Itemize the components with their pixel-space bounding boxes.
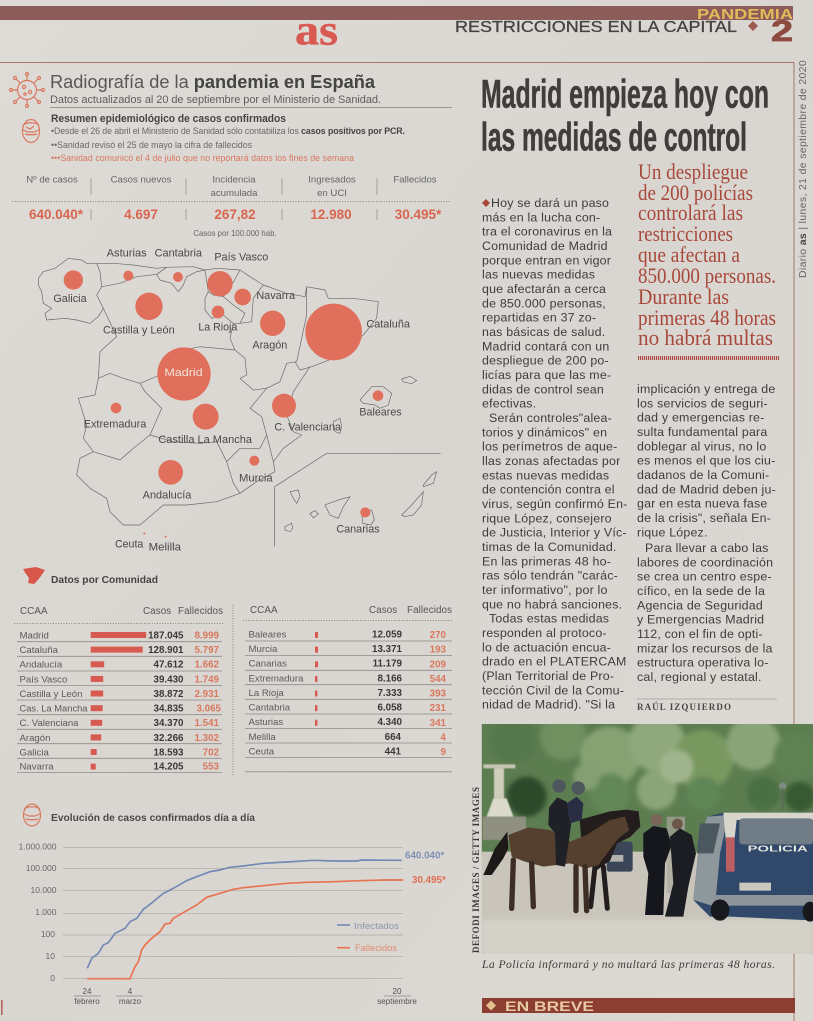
rows: Cantabria — [248, 703, 291, 714]
rows: C. Valenciana — [20, 718, 79, 729]
region labels: C. Valenciana — [274, 421, 341, 433]
article column 1: lo de actuación encua- — [482, 640, 611, 654]
small bars — [315, 632, 318, 726]
page header band — [0, 6, 793, 48]
article column 2: estructura operativa lo- — [637, 656, 769, 670]
article column 2: doblegar al virus, no lo — [637, 439, 766, 453]
article column 1: despliegue de 200 po- — [482, 354, 609, 368]
y axis labels: 10.000 — [30, 885, 57, 895]
line: fallecidos — [87, 880, 403, 979]
icon: diamond bullet — [748, 21, 758, 31]
stat values: 267,82 — [214, 207, 256, 222]
rows: 4 — [441, 732, 447, 743]
region labels: Extremadura — [84, 418, 146, 430]
photo caption: La Policía informará y no multará las primeras 48 horas. — [481, 958, 775, 971]
rows: 6.058 — [377, 703, 403, 714]
x axis labels: 20 — [393, 987, 402, 996]
article column 2: los servicios de seguri- — [637, 396, 768, 410]
police van — [693, 813, 813, 922]
rows: Murcia — [248, 644, 278, 655]
right table header: Fallecidos — [407, 605, 452, 616]
right table header: CCAA — [250, 605, 278, 616]
rows — [20, 630, 222, 772]
canary islands inset frame — [275, 453, 441, 547]
article column 1: porque entran en vigor — [482, 253, 611, 267]
region labels: Castilla y León — [103, 324, 175, 336]
x axis labels: marzo — [119, 997, 142, 1006]
date sidebar: Diario as | lunes, 21 de septiembre de 2020 — [798, 60, 809, 278]
article column 2: Para llevar a cabo las — [645, 541, 769, 555]
rows: 231 — [430, 703, 447, 714]
article column 1: de Justicia, Interior y Víc- — [482, 526, 627, 540]
summary notes: •Desde el 26 de abril el Ministerio de Sanidad sólo contabiliza los casos positivos por PCR. — [51, 126, 405, 136]
left table header: CCAA — [20, 606, 48, 617]
article column 1: rique López, consejero — [482, 511, 612, 525]
section title: RESTRICCIONES EN LA CAPITAL — [455, 19, 737, 36]
article column 1: nas básicas de salud. — [482, 325, 605, 339]
subtitle: Datos actualizados al 20 de septiembre por el Ministerio de Sanidad. — [50, 94, 381, 106]
region labels: Galicia — [53, 293, 87, 305]
byline: RAÚL IZQUIERDO — [637, 702, 731, 712]
page number: 2 — [771, 15, 793, 48]
stat labels: acumulada — [211, 188, 258, 199]
rows: 128.901 — [148, 645, 184, 656]
ground — [482, 852, 813, 955]
standing officers — [643, 814, 696, 917]
region labels: Cantabria — [155, 248, 202, 260]
rows: Cataluña — [20, 645, 59, 656]
x axis labels: 24 — [83, 987, 92, 996]
rows — [248, 630, 447, 758]
article column 1: En las primeras 48 ho- — [482, 554, 611, 568]
article column 2: 112, con el fin de opti- — [637, 627, 763, 641]
article column 1: torios y dinámicos" en — [482, 425, 607, 439]
summary notes: •••Sanidad comunicó el 4 de julio que no reportará datos los fines de semana — [51, 153, 354, 163]
rows: 187.045 — [148, 630, 184, 642]
rows: 18.593 — [154, 748, 184, 758]
region labels: Cataluña — [366, 318, 410, 330]
rows: 9 — [441, 747, 447, 758]
rows: Castilla y León — [20, 689, 82, 700]
rows: 8.999 — [194, 630, 220, 642]
icon: virus — [10, 72, 44, 108]
article column 2: de la crisis", señala En- — [637, 511, 771, 525]
en breve banner — [482, 998, 795, 1014]
right table header — [250, 605, 452, 616]
rows: 1.541 — [194, 718, 220, 729]
rows: 13.371 — [372, 644, 403, 655]
subheadline — [638, 159, 776, 350]
rows: 441 — [385, 746, 402, 758]
stat labels: en UCI — [317, 188, 347, 199]
stat labels: Casos nuevos — [111, 174, 172, 186]
subheadline: no habrá multas — [638, 325, 773, 350]
icon: spain map — [23, 567, 45, 584]
subheadline: restricciones — [638, 221, 733, 246]
rows: 38.872 — [154, 689, 184, 700]
bars — [91, 632, 146, 770]
stat labels: Fallecidos — [393, 174, 437, 186]
article column 1: Comunidad de Madrid — [482, 239, 608, 253]
rows: Navarra — [20, 762, 54, 772]
left table header: Fallecidos — [178, 606, 223, 617]
region labels: Aragón — [252, 340, 287, 352]
subheadline: 850.000 personas. — [638, 263, 776, 288]
article column 2: labores de coordinación — [637, 555, 773, 569]
article column 2: cífico, en la sede de la — [637, 584, 765, 598]
stat labels: Nº de casos — [26, 174, 78, 186]
region labels: Canarias — [336, 523, 380, 535]
street lamp — [779, 782, 786, 810]
article column 1: tección Civil de la Comu- — [482, 683, 624, 697]
left table header — [20, 606, 223, 617]
panel: evolución de casos — [19, 804, 446, 1006]
y axis labels: 100.000 — [26, 863, 57, 873]
legend — [337, 921, 399, 953]
rows: 553 — [203, 762, 220, 772]
article column 1: de contención contra el — [482, 483, 615, 497]
bottom left margin tick — [1, 1000, 3, 1015]
rows: 1.302 — [194, 733, 220, 744]
rows: Ceuta — [248, 746, 275, 758]
rows: 544 — [430, 674, 447, 685]
article column 1 — [482, 196, 627, 712]
region labels: Murcia — [239, 472, 273, 484]
article column 1: Madrid contará con un — [482, 339, 610, 353]
x axis labels: 4 — [128, 987, 133, 996]
stat values: 12.980 — [310, 207, 352, 222]
chart lines — [87, 860, 403, 979]
subheadline: controlará las — [638, 200, 743, 225]
article column 1: las nuevas medidas — [482, 268, 595, 282]
article column 1: los perímetros de aque- — [482, 440, 617, 454]
section heading: Datos por Comunidad — [51, 575, 158, 586]
summary notes: ••Sanidad revisó el 25 de mayo la cifra de fallecidos — [51, 140, 253, 150]
region labels: Asturias — [107, 248, 147, 260]
article column 2: dad y emergencias re- — [637, 411, 764, 425]
rows: Melilla — [248, 732, 276, 743]
article column 1: (Plan Territorial de Pro- — [482, 669, 614, 683]
article column 2: gar en esta nueva fase — [637, 497, 767, 511]
y axis labels: 100 — [41, 929, 55, 939]
article column 2: rique López. — [637, 525, 708, 539]
rows: Madrid — [20, 630, 49, 642]
newspaper logo: as — [295, 8, 338, 54]
rows: Baleares — [248, 630, 287, 640]
article column 1: timas de la Comunidad. — [482, 540, 617, 554]
article column 1: Serán controles"alea- — [489, 411, 612, 425]
article column 2: se crea un centro espe- — [637, 570, 772, 584]
stat footnote: Casos por 100.000 hab. — [193, 229, 277, 238]
region labels — [53, 248, 410, 554]
article column 1: Hoy se dará un paso — [491, 196, 609, 210]
subheadline: Un despliegue — [638, 159, 748, 184]
article column 1: nidad de Madrid). "Si la — [482, 698, 615, 712]
x axis labels — [74, 987, 417, 1006]
rows: Andalucía — [20, 660, 63, 671]
article column 2: es menos el que los ciu- — [637, 454, 775, 468]
en breve banner: EN BREVE — [505, 998, 594, 1014]
legend: Fallecidos — [355, 943, 397, 953]
article column 1: de 850.000 personas, — [482, 296, 606, 310]
rows: 393 — [430, 688, 447, 700]
end value: infectados: 640.040* — [405, 850, 444, 862]
van lettering: POLICIA — [748, 844, 808, 854]
rows: 14.205 — [154, 762, 184, 772]
byline — [637, 699, 777, 712]
article column 2: dad de Madrid deben ju- — [637, 482, 776, 496]
rows: 664 — [385, 732, 402, 743]
mounted officers — [548, 779, 585, 867]
region labels: País Vasco — [214, 251, 268, 263]
stat values: 640.040* — [29, 207, 84, 222]
dark horse — [580, 810, 640, 908]
article column 2: dadanos de la Comuni- — [637, 468, 769, 482]
rows: País Vasco — [20, 674, 67, 685]
rows: 270 — [430, 630, 447, 641]
rows: 32.266 — [154, 733, 184, 744]
rows: 47.612 — [154, 660, 184, 671]
section label: Pandemia: PANDEMIA — [697, 6, 793, 23]
stat values: 30.495* — [395, 207, 442, 222]
rows: 4.340 — [377, 717, 403, 728]
fountain — [483, 764, 526, 840]
x axis labels: septiembre — [377, 997, 417, 1006]
chart heading: Evolución de casos confirmados día a día — [51, 813, 255, 824]
rows: 8.166 — [377, 673, 403, 684]
y axis labels — [19, 842, 57, 983]
rows: Cas. La Mancha — [20, 704, 88, 715]
region labels: La Rioja — [198, 322, 237, 334]
photo: mounted police and van — [482, 713, 813, 955]
article column 1: didas de control sean — [482, 382, 604, 396]
bubbles — [64, 270, 383, 538]
islands — [285, 376, 437, 532]
article column 2: y Emergencias Madrid — [637, 613, 764, 627]
stat labels: Ingresados — [308, 174, 356, 186]
rows: 11.179 — [373, 659, 403, 670]
y axis labels: 1.000 — [35, 907, 57, 917]
region labels: Baleares — [359, 407, 402, 419]
photo credit: DEFODI IMAGES / GETTY IMAGES — [471, 787, 481, 953]
stat labels — [26, 174, 437, 199]
summary notes — [51, 126, 405, 163]
rows: 5.797 — [194, 645, 220, 656]
article column 1: ter informativo", por lo — [482, 583, 608, 597]
region labels: Ceuta — [115, 539, 143, 551]
icon: face mask — [24, 804, 40, 826]
icon: face mask — [22, 120, 40, 142]
article column 1: licías para que las me- — [482, 368, 611, 382]
icon: diamond bullet — [486, 1000, 496, 1010]
subheadline: primeras 48 horas — [638, 305, 776, 330]
article column 2: implicación y entrega de — [637, 382, 775, 396]
horses — [483, 810, 640, 911]
article column 1: drado en el PLATERCAM — [482, 655, 626, 669]
article column 1: llas zonas afectadas por — [482, 454, 620, 468]
summary heading: Resumen epidemiológico de casos confirmados — [51, 113, 286, 125]
rows: Galicia — [20, 748, 49, 758]
right table — [243, 605, 453, 772]
region labels: Castilla La Mancha — [158, 434, 252, 446]
article column 1: Todas estas medidas — [489, 612, 609, 626]
article column 1: repartidas en 37 zo- — [482, 311, 596, 325]
mainland regions — [38, 258, 378, 525]
article column 1: virus, según confirmó En- — [482, 497, 627, 511]
rows: Canarias — [248, 659, 287, 670]
left table — [14, 606, 224, 772]
article column 1: estas nuevas medidas — [482, 468, 609, 482]
title: Radiografía de la pandemia en España — [50, 71, 376, 92]
map of Spain with case bubbles — [38, 248, 441, 554]
region labels: Navarra — [256, 290, 295, 302]
subheadline: que afectan a — [638, 242, 740, 267]
region labels: Madrid — [164, 367, 203, 379]
rows: Asturias — [248, 717, 283, 728]
region labels: Melilla — [149, 542, 181, 554]
rows: 12.059 — [372, 630, 403, 640]
parked car — [607, 842, 633, 872]
article column 1: que no habrá sanciones. — [482, 597, 622, 611]
article column 1: tra el coronavirus en la — [482, 225, 612, 239]
y axis labels: 1.000.000 — [19, 842, 57, 852]
end value: fallecidos: 30.495* — [412, 875, 446, 886]
x axis labels: febrero — [74, 997, 100, 1006]
subheadline: Durante las — [638, 284, 729, 309]
article column 1: ras sólo tendrán "carác- — [482, 569, 618, 583]
article column 2: cal, regional y estatal. — [637, 670, 762, 684]
line: infectados — [87, 860, 402, 968]
rows: 2.931 — [194, 689, 220, 700]
rows: 7.333 — [377, 688, 403, 699]
rows: 193 — [430, 645, 447, 656]
panel: radiografía de la pandemia — [10, 71, 452, 238]
article column 1: más en la lucha con- — [482, 210, 600, 224]
stat labels: Incidencia — [212, 174, 256, 186]
article column 2: sulta fundamental para — [637, 425, 767, 439]
stat values: 4.697 — [124, 207, 158, 222]
y axis labels: 10 — [46, 951, 55, 961]
brown horse — [483, 817, 629, 911]
rows: 209 — [430, 659, 447, 670]
legend: Infectados — [354, 921, 399, 931]
rows: 3.065 — [196, 704, 222, 715]
article column 1: efectivas. — [482, 397, 536, 411]
rows: 702 — [203, 748, 220, 758]
article column 2: Agencia de Seguridad — [637, 598, 763, 612]
rows: 39.430 — [154, 674, 184, 685]
article column 2 — [637, 382, 776, 684]
right table header: Casos — [369, 605, 397, 616]
region labels: Andalucía — [143, 490, 191, 502]
rows: 34.835 — [154, 704, 184, 715]
rows: Aragón — [20, 733, 50, 744]
stat values — [29, 207, 442, 222]
panel: datos por comunidad — [14, 567, 453, 775]
hatched divider — [638, 356, 779, 360]
y axis labels: 0 — [50, 973, 55, 983]
headline — [481, 72, 769, 160]
rows: La Rioja — [248, 688, 284, 699]
left table header: Casos — [143, 606, 171, 617]
trees — [482, 713, 813, 857]
article column 1: responden al protoco- — [482, 626, 607, 640]
rows: 1.749 — [194, 674, 220, 685]
rows: 1.662 — [194, 660, 220, 671]
rows: Extremadura — [248, 673, 304, 684]
subheadline: de 200 policías — [638, 180, 753, 205]
rows: 341 — [430, 718, 447, 729]
article column 2: mizar los recursos de la — [637, 641, 773, 655]
rows: 34.370 — [154, 718, 184, 729]
article column 1: que afectarán a cerca — [482, 282, 606, 296]
